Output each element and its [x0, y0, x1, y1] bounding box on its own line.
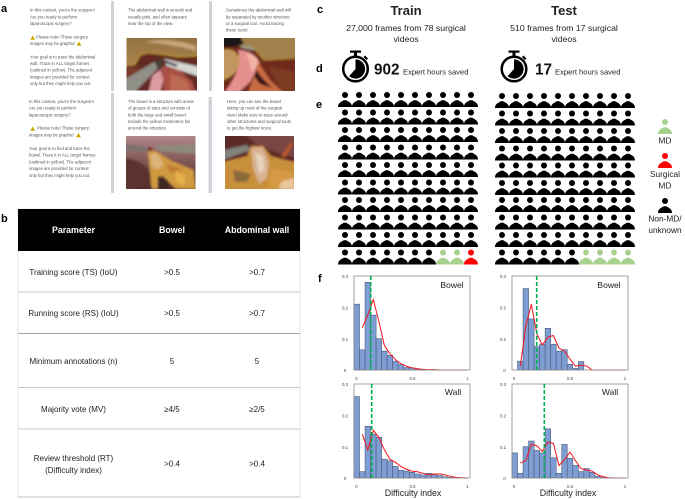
chart: train bowel histogram: 0	[344, 368, 347, 373]
chart: train bowel histogram: 0.3	[342, 274, 349, 279]
heading: test: Test	[551, 3, 578, 18]
chart: test bowel histogram: 1	[624, 376, 627, 381]
text block: wall tools note: be separated by another structure	[226, 14, 290, 19]
table header: Bowel	[159, 225, 185, 235]
text block: wall intro: Please note! These surgery	[36, 34, 89, 39]
text block: wall tools note	[226, 8, 291, 33]
panel label e: e	[316, 99, 322, 111]
chart: test wall histogram: 1	[624, 484, 627, 489]
text block: wall description: The abdominal wall is smooth and	[128, 8, 193, 12]
chart: test bowel histogram: 0	[503, 368, 506, 373]
chart: test wall histogram: 0.1	[500, 445, 507, 450]
photo: bowel filling the view	[225, 136, 294, 189]
panel a: annotation tutorial screens	[29, 1, 297, 193]
chart: test bowel histogram: 0.1	[500, 337, 507, 342]
heading: test: 510 frames from 17 surgical	[510, 23, 618, 33]
chart: train wall histogram: 0	[355, 484, 358, 489]
chart: train wall histogram	[342, 382, 470, 489]
text block: bowel intro: Please note! These surgery	[37, 126, 90, 131]
row: minimum annotations: 5	[255, 357, 260, 366]
row: running score: Running score (RS) (IoU)	[28, 309, 119, 318]
text block: wall tools note: Sometimes the abdominal wall will	[226, 8, 291, 12]
photo: abdominal wall separated by structure	[224, 38, 295, 91]
heading: train: videos	[393, 34, 419, 44]
text block: bowel view note: other structures and surgical tools	[227, 119, 291, 124]
chart: train bowel histogram: 0.2	[342, 306, 349, 310]
chart: test wall histogram	[500, 382, 628, 489]
heading: train: 27,000 frames from 78 surgical	[346, 23, 466, 33]
text block: bowel view note	[227, 99, 291, 131]
chart: test bowel histogram: 0	[513, 376, 516, 381]
text block: bowel intro: images may be graphic!	[29, 132, 74, 137]
row: review threshold: >0.4	[164, 460, 180, 468]
chart: train wall histogram: 0.5	[409, 484, 416, 489]
row: review threshold: Review threshold (RT)	[34, 454, 114, 463]
chart: train wall histogram: 0	[344, 476, 347, 481]
text block: bowel description	[128, 99, 194, 131]
chart: test wall histogram: 0.3	[500, 382, 507, 387]
stat: train expert hours: 902	[374, 62, 400, 78]
row: majority vote: ≥4/5	[164, 405, 180, 414]
photo: bowel with tool	[126, 136, 196, 189]
text block: wall intro: only but they might help you out.	[30, 81, 91, 86]
row: review threshold	[34, 454, 265, 475]
text block: bowel intro: laparoscopic surgery?	[29, 112, 71, 117]
icon: stopwatch train	[343, 50, 368, 81]
panel label d: d	[316, 63, 323, 75]
legend item: surgical MD: Surgical	[650, 169, 680, 179]
text block: wall description: usually pink, and often appears	[128, 14, 187, 19]
text block: wall intro: wall. Trace in ALL target frames	[30, 61, 89, 66]
text block: wall intro	[30, 8, 95, 86]
text block: wall intro: laparoscopic surgery?	[30, 21, 72, 26]
text block: wall description: near the top of the view.	[128, 21, 173, 26]
stat: train expert hours: Expert hours saved	[403, 68, 468, 76]
icon grid: test annotators	[495, 93, 635, 264]
text block: bowel description: of groups of sacs and consists of	[128, 106, 191, 111]
chart: test bowel histogram: 0.3	[500, 274, 507, 279]
chart: train wall histogram: 0.2	[342, 414, 349, 418]
panel label a: a	[1, 3, 8, 15]
chart: train bowel histogram: Bowel	[440, 280, 464, 290]
row: running score: >0.5	[164, 309, 180, 318]
chart: train bowel histogram: 0.5	[409, 376, 416, 381]
chart: test wall histogram: 0	[503, 476, 506, 481]
text block: bowel intro: Are you ready to perform	[29, 106, 76, 111]
row: minimum annotations: 5	[170, 357, 175, 366]
chart: test wall histogram: 0.5	[567, 484, 574, 489]
chart: test bowel histogram: 0.2	[500, 306, 507, 310]
row: review threshold: >0.4	[249, 460, 265, 468]
legend item: non-MD: unknown	[648, 225, 682, 235]
legend item: surgical MD	[650, 153, 680, 190]
text block: bowel view note: taking up most of the surgical	[227, 106, 282, 111]
text block: bowel intro: bowel. Trace it in ALL target frames	[29, 153, 95, 158]
text block: bowel description: around the structure.	[128, 126, 167, 131]
chart: train bowel histogram: 0	[355, 376, 358, 381]
table header: Parameter	[52, 225, 96, 235]
text block: wall intro: (outlined in yellow). The adjacent	[30, 68, 93, 73]
chart: test bowel histogram: 0.5	[567, 376, 574, 381]
heading: test: videos	[551, 34, 577, 44]
chart: train bowel histogram	[342, 274, 470, 381]
row: running score	[28, 309, 265, 318]
row: majority vote	[41, 405, 265, 414]
row: training score: >0.5	[164, 268, 180, 277]
heading: train	[346, 3, 466, 44]
text block: bowel intro: (outlined in yellow). The adjacent	[29, 159, 92, 164]
text block: wall intro: Your goal is to trace the abdominal	[30, 54, 95, 59]
panel label f: f	[318, 273, 322, 285]
legend item: surgical MD: MD	[659, 180, 671, 190]
panel b: parameter table	[18, 209, 300, 498]
icon grid: train annotators	[338, 92, 478, 264]
chart: test bowel histogram: Bowel	[597, 280, 621, 290]
row: running score: >0.7	[249, 309, 265, 318]
table header	[18, 209, 300, 251]
chart: train wall histogram: 0.1	[342, 445, 349, 450]
row: minimum annotations	[29, 357, 260, 366]
stat: train expert hours	[374, 62, 468, 78]
text block: wall tools note: these tools!	[226, 28, 248, 33]
chart: train bowel histogram: 1	[466, 376, 469, 381]
photo: abdominal wall with tools	[126, 38, 197, 90]
stat: test expert hours: 17	[535, 62, 552, 78]
stat: test expert hours	[535, 62, 620, 78]
table header: Abdominal wall	[225, 225, 289, 235]
axis title: test: Difficulty index	[540, 488, 597, 498]
text block: bowel view note: Here, you can see the bowel	[227, 99, 281, 104]
legend item: MD: MD	[659, 136, 671, 146]
text block: bowel intro	[29, 99, 95, 178]
chart: test wall histogram: 0.2	[500, 414, 507, 418]
text block: wall intro: images are provided for context	[30, 74, 90, 79]
text block: bowel intro: images are provided for context	[29, 166, 89, 171]
text block: bowel description: Include the yellow mesenteric fat	[128, 119, 190, 124]
text block: bowel intro: In this context, you're the surgeon!	[29, 99, 94, 104]
text block: bowel intro: only but they might help you out.	[29, 173, 90, 178]
row: minimum annotations: Minimum annotations (n)	[29, 357, 118, 366]
row: majority vote: ≥2/5	[249, 405, 265, 414]
text block: bowel intro: Your goal is to find and trace the	[29, 146, 90, 151]
text block: wall intro: images may be graphic!	[30, 41, 75, 46]
text block: wall description	[128, 8, 193, 26]
heading: train: Train	[390, 3, 422, 18]
chart: train wall histogram: 0.3	[342, 382, 349, 387]
text block: wall intro: In this context, you're the surgeon!	[30, 8, 95, 12]
text block: bowel description: both the large and small bowel.	[128, 112, 187, 117]
legend item: non-MD	[648, 198, 682, 235]
chart: test wall histogram: 0	[513, 484, 516, 489]
row: review threshold: (Difficulty index)	[45, 466, 102, 475]
text block: bowel view note: view! Make sure to trace around	[227, 112, 288, 117]
chart: train wall histogram: 1	[466, 484, 469, 489]
chart: train bowel histogram: 0.1	[342, 337, 349, 342]
icon: stopwatch test	[502, 50, 526, 81]
row: training score: >0.7	[249, 268, 265, 277]
chart: test bowel histogram	[500, 274, 628, 381]
heading: test	[510, 3, 618, 44]
text block: wall tools note: or a surgical tool. Avoid tracing	[226, 21, 284, 26]
stat: test expert hours: Expert hours saved	[555, 68, 620, 76]
legend	[648, 119, 682, 235]
axis title: train: Difficulty index	[385, 488, 442, 498]
text block: bowel view note: to get the highest score.	[227, 126, 272, 131]
chart: train wall histogram: Wall	[445, 387, 461, 397]
panel label b: b	[1, 213, 8, 225]
row: majority vote: Majority vote (MV)	[41, 405, 106, 414]
chart: test wall histogram: Wall	[602, 387, 618, 397]
legend item: non-MD: Non-MD/	[648, 214, 682, 224]
panel label c: c	[317, 4, 323, 16]
row: training score	[29, 268, 265, 277]
text block: wall intro: Are you ready to perform	[30, 14, 77, 19]
row: training score: Training score (TS) (IoU)	[29, 268, 118, 277]
text block: bowel description: The bowel is a structure with areas	[128, 99, 194, 104]
